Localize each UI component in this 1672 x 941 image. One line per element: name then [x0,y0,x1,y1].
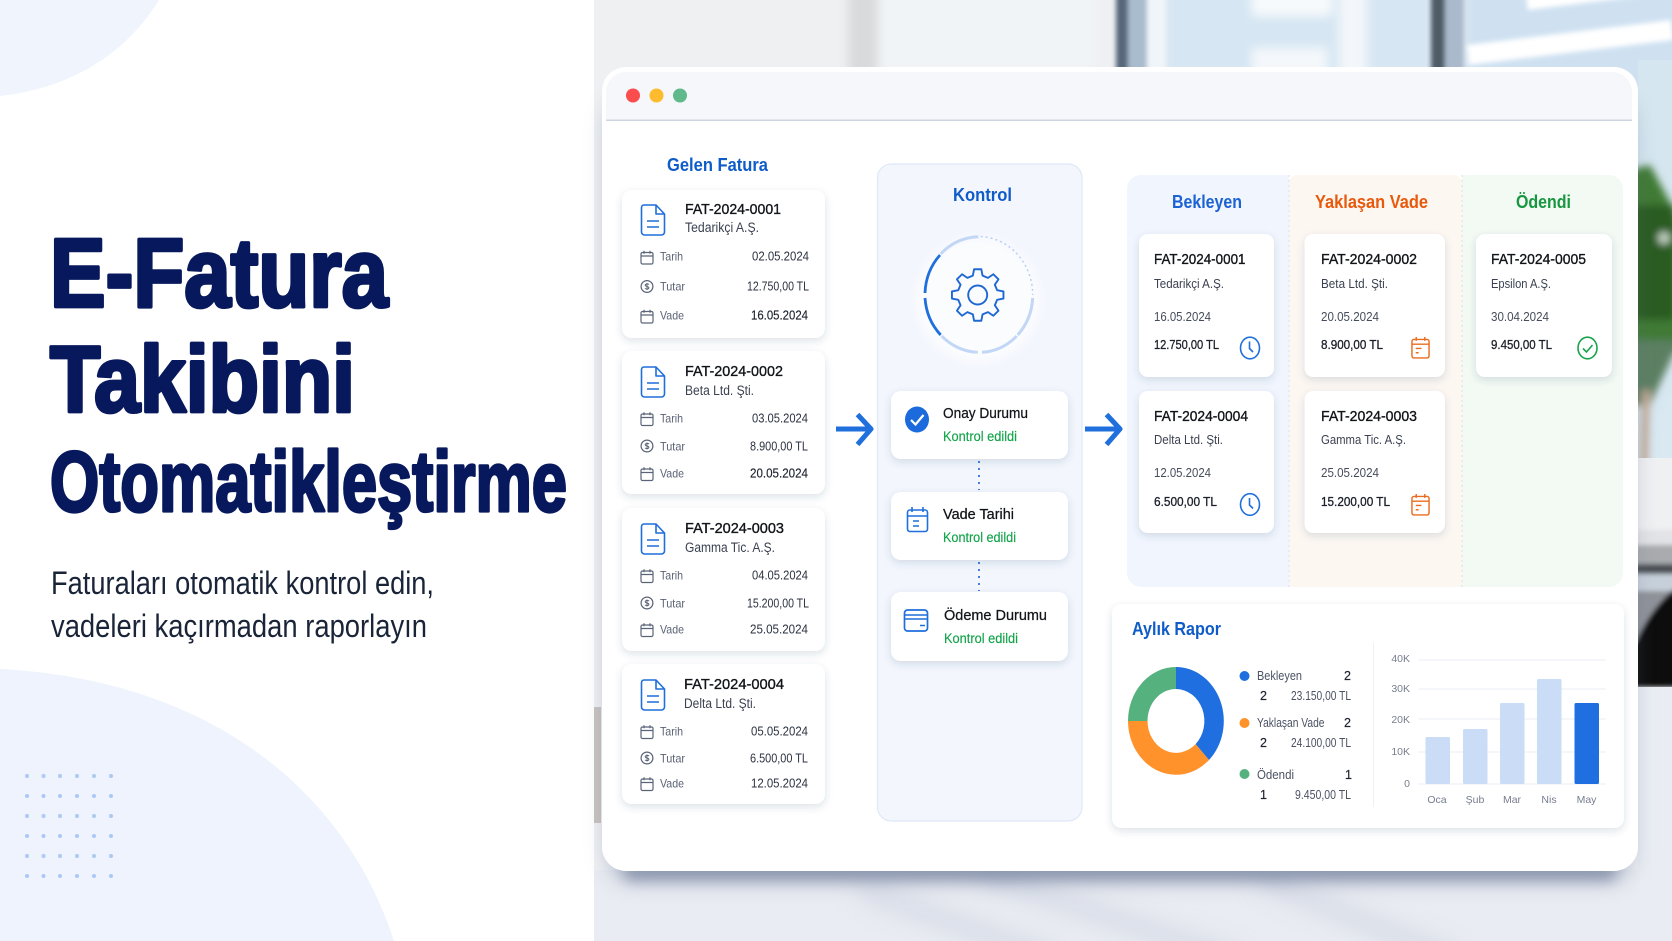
legend: 23.150,00 TL [1291,689,1351,703]
card FAT-2024-0004 [1139,391,1274,533]
dot pattern [25,774,113,878]
legend: 2 [1344,716,1351,730]
status card: Ödeme Durumu [891,592,1068,661]
status card: Onay Durumu [891,391,1068,459]
invoice card 2: 8.900,00 TL [750,439,808,453]
status card: Vade Tarihi: Kontrol edildi [943,530,1016,545]
app window [602,67,1638,880]
card FAT-2024-0001: Tedarikçi A.Ş. [1154,276,1224,291]
invoice card 1: 02.05.2024 [752,249,809,263]
invoice card 2 [622,351,825,494]
card FAT-2024-0002: Beta Ltd. Şti. [1321,276,1388,291]
column: Yaklaşan Vade: Yaklaşan Vade [1315,192,1428,212]
invoice card 2: Tutar [660,439,685,453]
card FAT-2024-0001: 12.750,00 TL [1154,337,1219,352]
title: Takibini [50,326,355,432]
bar chart: May [1577,794,1597,806]
invoice card 3: 25.05.2024 [750,622,808,636]
card FAT-2024-0004: 6.500,00 TL [1154,494,1217,509]
card FAT-2024-0002 [1304,234,1445,377]
legend: 2 [1344,669,1351,683]
connector dots [978,461,980,591]
column separators [1289,175,1462,587]
status card: Vade Tarihi: Vade Tarihi [943,506,1014,523]
decorative blob top [0,0,159,96]
invoice card 2: Vade [660,466,684,480]
card FAT-2024-0004: 12.05.2024 [1154,465,1211,480]
column: Ödendi [1462,175,1623,587]
panel: Kontrol [878,164,1082,821]
column: Ödendi: Ödendi [1516,192,1571,212]
bar chart: Şub [1466,794,1484,806]
invoice card 4: Tutar [660,751,685,765]
card FAT-2024-0003: Gamma Tic. A.Ş. [1321,432,1406,447]
invoice card 3: Tarih [660,568,683,582]
heading: Aylık Rapor: Aylık Rapor [1132,619,1221,639]
invoice card 1: 12.750,00 TL [747,279,809,293]
panel: Aylık Rapor [1112,604,1624,828]
column: Bekleyen: Bekleyen [1172,192,1242,212]
card FAT-2024-0005: 30.04.2024 [1491,309,1549,324]
invoice card 1: Tarih [660,249,683,263]
invoice card 1: FAT-2024-0001 [685,201,781,218]
bar chart: 10K [1391,746,1410,758]
table reflections [860,875,1460,941]
legend: Bekleyen [1257,669,1302,683]
invoice card 4: Delta Ltd. Şti. [684,696,756,711]
card FAT-2024-0004: FAT-2024-0004 [1154,408,1248,425]
invoice card 1: Tutar [660,279,685,293]
window controls [626,88,687,102]
invoice card 3: 15.200,00 TL [747,596,809,610]
legend: 1 [1345,768,1352,782]
card FAT-2024-0003: 25.05.2024 [1321,465,1379,480]
title: E-Fatura [50,218,389,328]
subtitle [51,565,434,644]
invoice card 4 [622,664,825,804]
card FAT-2024-0004: Delta Ltd. Şti. [1154,432,1223,447]
legend: Yaklaşan Vade [1257,716,1325,730]
column: Bekleyen [1127,175,1289,587]
invoice card 4: FAT-2024-0004 [684,676,784,693]
panel: status board [1127,175,1623,587]
invoice card 2: 20.05.2024 [750,466,808,480]
invoice card 4: 05.05.2024 [751,724,808,738]
bar chart: Oca [1427,794,1447,806]
card FAT-2024-0002: FAT-2024-0002 [1321,251,1417,268]
invoice card 4: Vade [660,776,684,790]
decorative blob bottom [0,669,394,941]
invoice card 3: Vade [660,622,684,636]
column: Yaklaşan Vade [1289,175,1462,587]
invoice card 3: 04.05.2024 [752,568,808,582]
bar chart: Nis [1541,794,1557,806]
invoice card 1: Vade [660,308,684,322]
bar chart: 0 [1404,778,1410,790]
status card: Vade Tarihi [891,492,1068,560]
heading: Gelen Fatura: Gelen Fatura [667,155,769,175]
legend: 24.100,00 TL [1291,736,1351,750]
status card: Onay Durumu: Onay Durumu [943,405,1028,422]
card FAT-2024-0005: FAT-2024-0005 [1491,251,1586,268]
bar chart: 40K [1391,653,1410,665]
invoice card 1: Tedarikçi A.Ş. [685,220,759,235]
status card: Ödeme Durumu: Kontrol edildi [944,631,1018,646]
invoice card 2: Beta Ltd. Şti. [685,383,754,398]
arrow: invoices to control [836,414,871,444]
card FAT-2024-0001: FAT-2024-0001 [1154,251,1246,268]
invoice card 4: 12.05.2024 [751,776,808,790]
photo background: blurred office [594,0,1672,941]
invoice card 3: Gamma Tic. A.Ş. [685,540,775,555]
invoice card 3 [622,508,825,651]
subtitle: vadeleri kaçırmadan raporlayın [51,608,427,644]
title bar [606,72,1632,121]
bar chart: 30K [1391,683,1410,695]
invoice card 2: FAT-2024-0002 [685,363,783,380]
donut chart [1128,667,1224,775]
card FAT-2024-0001 [1139,234,1274,377]
card FAT-2024-0005 [1476,234,1612,377]
heading: Kontrol: Kontrol [953,185,1012,205]
card FAT-2024-0002: 8.900,00 TL [1321,337,1383,352]
legend: 1 [1260,788,1267,802]
legend: 2 [1260,736,1267,750]
bar chart: 20K [1391,714,1410,726]
status card: Ödeme Durumu: Ödeme Durumu [944,606,1047,624]
legend [1240,669,1352,802]
arrow: control to board [1085,414,1120,444]
legend: 2 [1260,689,1267,703]
card FAT-2024-0005: Epsilon A.Ş. [1491,276,1551,291]
status card: Onay Durumu: Kontrol edildi [943,429,1017,444]
bar chart [1391,653,1606,806]
title: Otomatikleştirme [50,435,567,530]
legend: 9.450,00 TL [1295,788,1351,802]
invoice card 3: FAT-2024-0003 [685,520,784,537]
subtitle: Faturaları otomatik kontrol edin, [51,565,434,601]
card FAT-2024-0001: 16.05.2024 [1154,309,1211,324]
invoice card 4: Tarih [660,724,683,738]
invoice card 1: 16.05.2024 [751,308,808,322]
invoice card 2: Tarih [660,411,683,425]
invoice card 1 [622,190,825,338]
icon: gear with progress ring [916,236,1040,362]
legend: Ödendi [1257,768,1294,782]
invoice card 3: Tutar [660,596,685,610]
title [50,218,567,530]
invoice card 4: 6.500,00 TL [750,751,808,765]
card FAT-2024-0005: 9.450,00 TL [1491,337,1552,352]
right edge scenery [1638,60,1672,460]
card FAT-2024-0002: 20.05.2024 [1321,309,1379,324]
invoice card 2: 03.05.2024 [752,411,808,425]
card FAT-2024-0003: FAT-2024-0003 [1321,408,1417,425]
left white panel [0,0,594,941]
bar chart: Mar [1503,794,1522,806]
card FAT-2024-0003 [1304,391,1445,533]
card FAT-2024-0003: 15.200,00 TL [1321,494,1390,509]
